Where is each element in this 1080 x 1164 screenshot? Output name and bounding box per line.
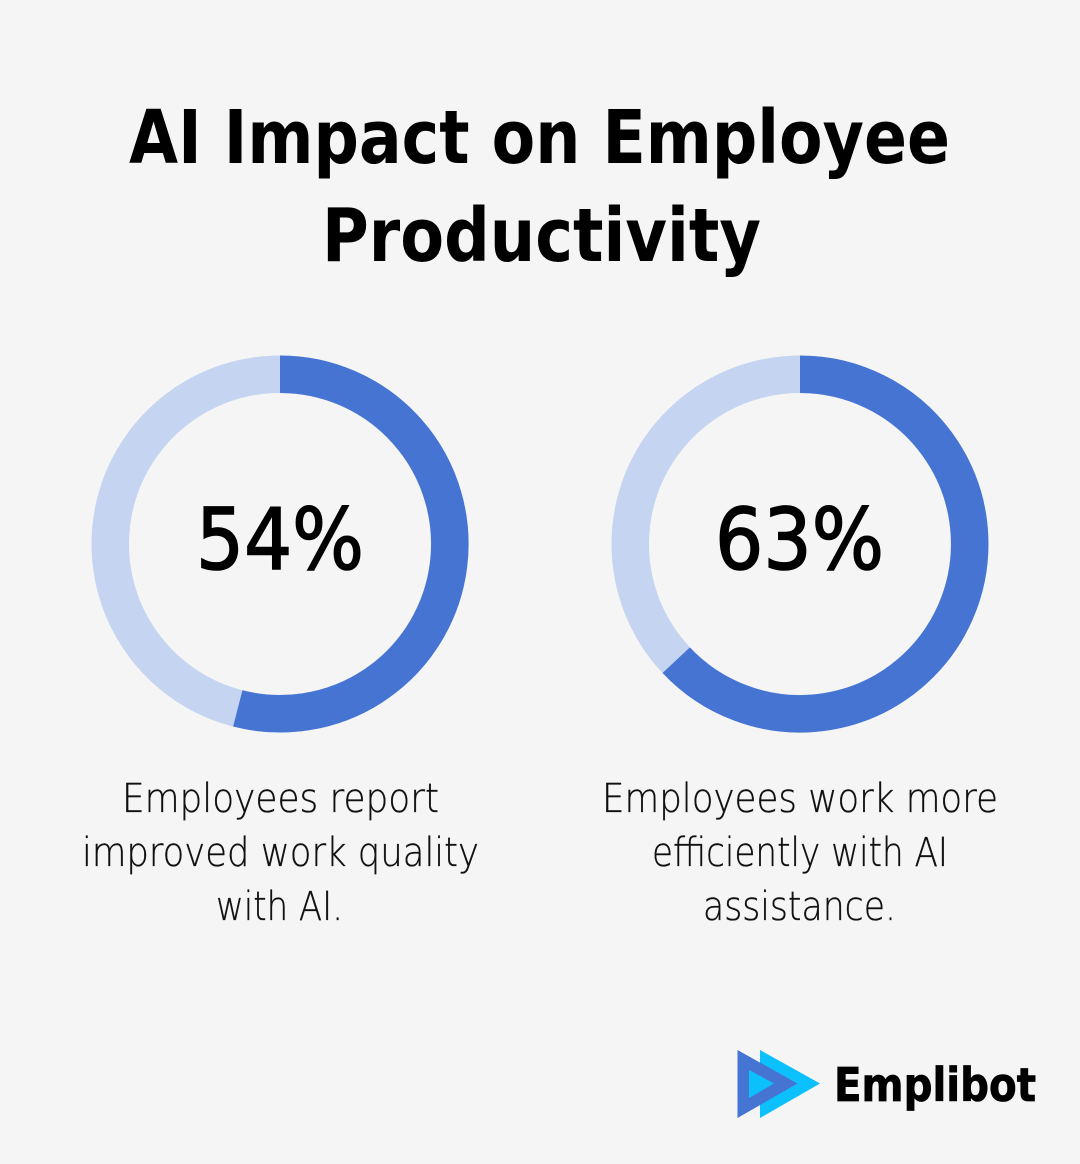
panel: 54% stat: [82, 374, 479, 930]
icon: play triangles: [738, 1050, 820, 1118]
value: 54%: 54%: [196, 491, 364, 590]
title: AI Impact on Employee: [129, 95, 950, 181]
description: work quality: [82, 776, 479, 930]
description: work quality: improved work quality: [82, 830, 479, 876]
description: work quality: with AI.: [216, 884, 343, 930]
wordmark: Emplibot: [834, 1058, 1036, 1112]
donut chart: 54%: [110, 374, 450, 714]
description: efficiency: assistance.: [703, 884, 896, 930]
logo: Emplibot: [738, 1050, 1036, 1118]
description: efficiency: efficiently with AI: [652, 830, 948, 876]
title: Productivity: [322, 193, 761, 279]
donut chart: 63%: [630, 374, 970, 714]
panel: 63% stat: [602, 374, 998, 930]
description: work quality: Employees report: [122, 776, 439, 822]
value: 63%: 63%: [715, 491, 884, 590]
description: efficiency: [602, 776, 998, 930]
description: efficiency: Employees work more: [602, 776, 998, 822]
title: [129, 95, 950, 279]
